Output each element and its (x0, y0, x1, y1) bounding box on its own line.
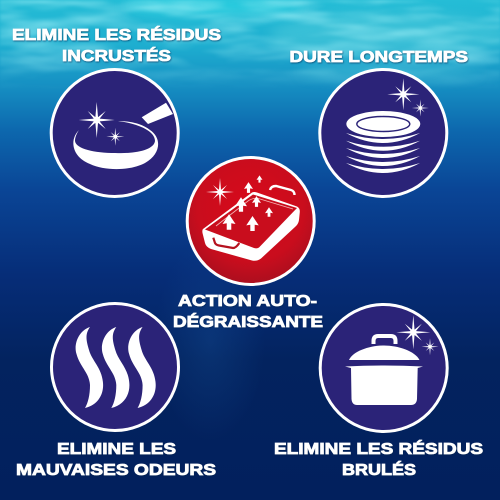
icon: roasting pan badge (187, 158, 314, 284)
panel: elimine les mauvaises odeurs (16, 304, 216, 479)
panel: action auto-degraissante (173, 158, 323, 331)
icon: stack of plates badge (320, 70, 447, 196)
heading: action auto-degraissante: DÉGRAISSANTE (173, 312, 323, 331)
heading: dure longtemps: DURE LONGTEMPS (290, 49, 468, 66)
panel: elimine les residus incrustes (12, 25, 221, 196)
heading: elimine les residus incrustes (12, 25, 221, 65)
heading: action auto-degraissante (173, 293, 323, 331)
heading: elimine les mauvaises odeurs: ELIMINE LES (57, 441, 176, 458)
heading: elimine les mauvaises odeurs (16, 441, 216, 479)
grease arrows (222, 175, 273, 231)
heading: elimine les residus incrustes: INCRUSTÉS (62, 46, 171, 65)
panel: dure longtemps (290, 49, 468, 196)
heading: elimine les residus brules: BRULÉS (342, 460, 416, 479)
heading: elimine les residus brules: ELIMINE LES RÉSIDUS (274, 439, 483, 458)
heading: action auto-degraissante: ACTION AUTO- (178, 293, 317, 310)
icon: cooking pot badge (320, 304, 447, 432)
heading: elimine les mauvaises odeurs: MAUVAISES ODEURS (16, 462, 216, 479)
icon: steam badge (52, 304, 178, 430)
heading: elimine les residus incrustes: ELIMINE LES RÉSIDUS (12, 25, 221, 44)
roasting dish (202, 186, 300, 261)
icon: frying pan badge (51, 70, 178, 196)
panel: elimine les residus brules (274, 304, 483, 479)
heading: elimine les residus brules (274, 439, 483, 479)
